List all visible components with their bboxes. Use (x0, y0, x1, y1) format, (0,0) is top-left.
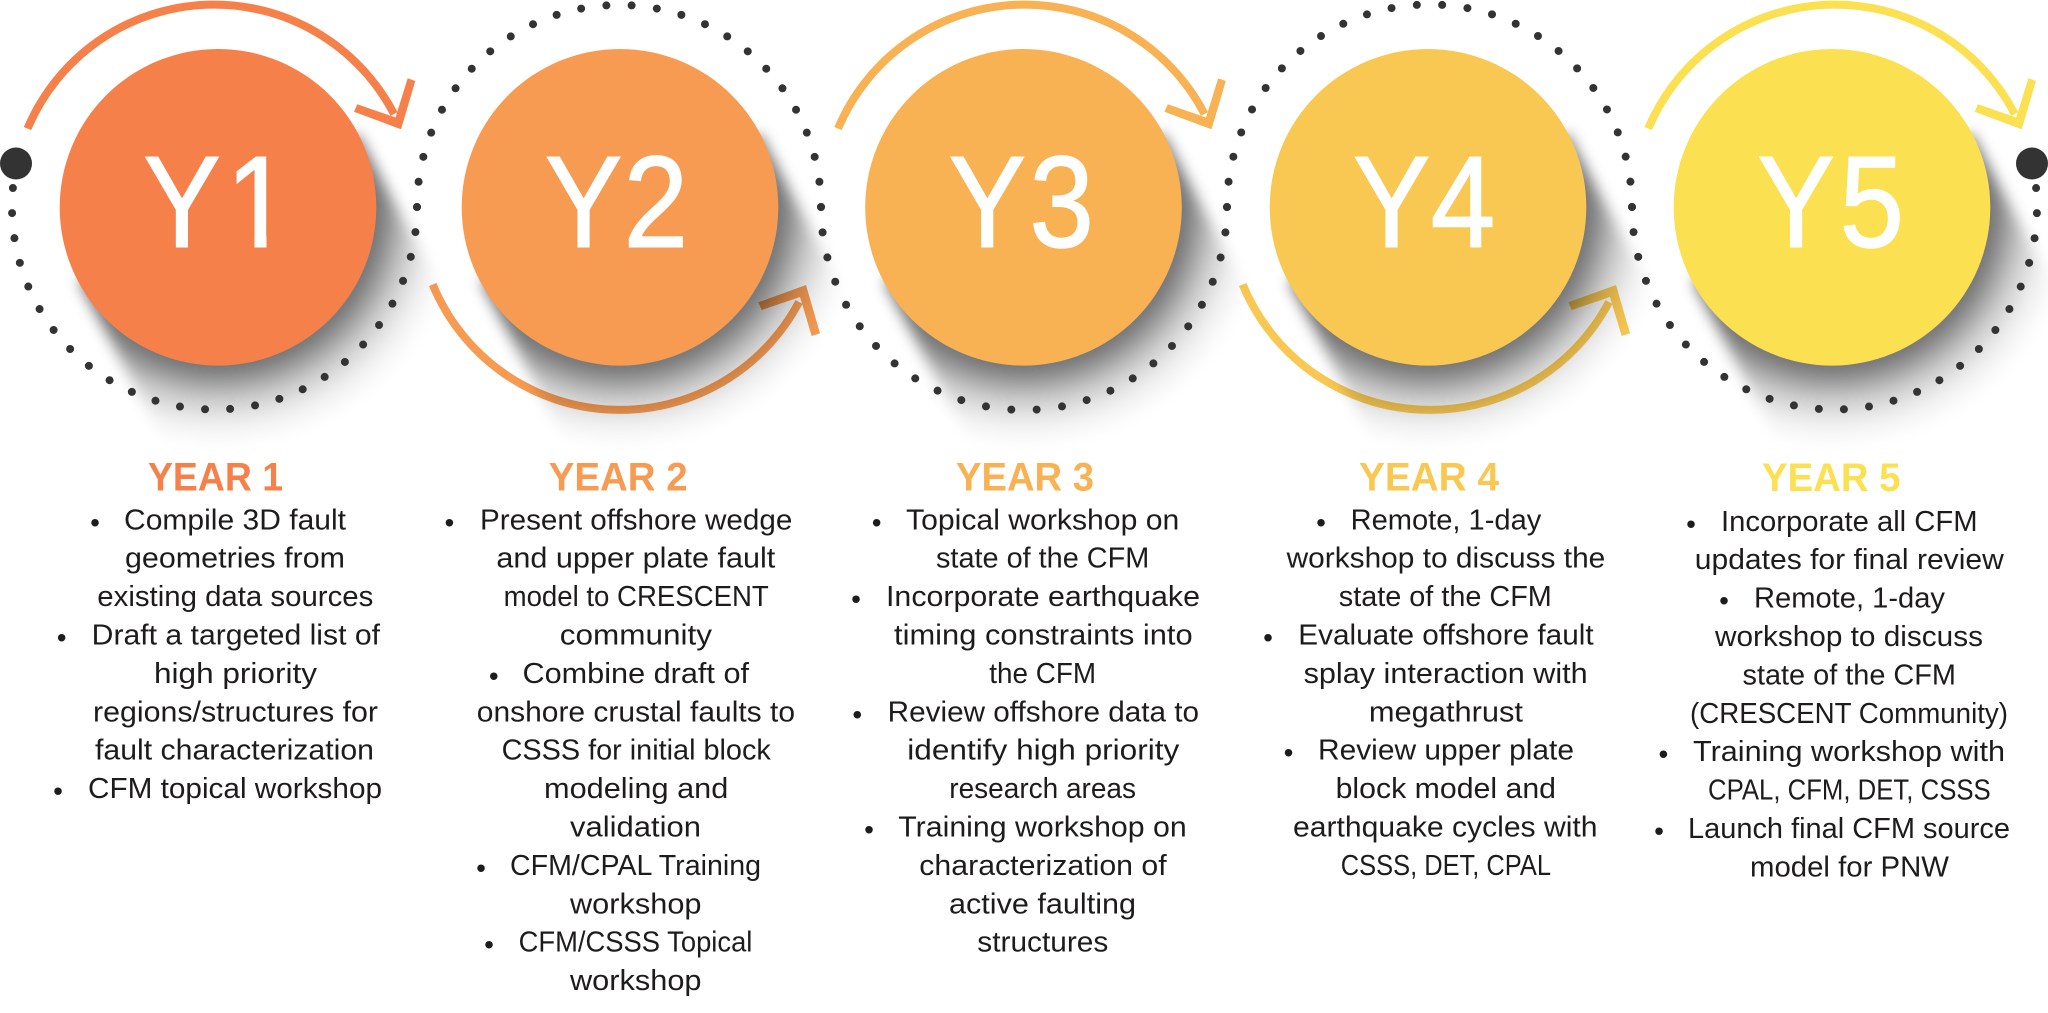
end marker dot (2016, 148, 2048, 180)
text block: year 2 tasks: community (560, 620, 713, 652)
text block: year 4 tasks: Remote, 1-day (1351, 504, 1542, 536)
text block: year 1 tasks: high priority (154, 658, 318, 690)
text block: year 2 tasks: onshore crustal faults to (477, 696, 795, 728)
text block: year 3 tasks: Training workshop on (898, 812, 1187, 844)
text block: year 5 tasks: • (1719, 585, 1729, 616)
text block: year 1 tasks: • (57, 622, 67, 653)
arrow: year 4 bottom arc (1243, 284, 1630, 410)
text block: year 3 tasks: timing constraints into (894, 620, 1193, 652)
text block: year 3 tasks: characterization of (919, 850, 1168, 882)
text block: year 5 tasks: • (1658, 739, 1668, 770)
arrow: year 3 top arc (838, 5, 1226, 129)
start marker dot (0, 148, 32, 180)
text block: year 1 tasks: fault characterization (95, 735, 374, 767)
shadow: year 4 circle (1288, 133, 1685, 501)
heading: year 2: YEAR 2 (549, 456, 688, 500)
text block: year 2 tasks: and upper plate fault (496, 543, 775, 575)
text block: year 2 tasks: • (476, 852, 486, 883)
text block: year 5 tasks: • (1654, 816, 1664, 846)
text block: year 1 tasks: geometries from (125, 543, 345, 575)
text block: year 4 tasks: • (1263, 622, 1273, 653)
text block: year 2 tasks: validation (570, 812, 701, 844)
text block: year 2 tasks: Present offshore wedge (480, 504, 792, 536)
text block: year 1 tasks: regions/structures for (93, 696, 378, 728)
text block: year 1 tasks: existing data sources (97, 581, 373, 613)
text block: year 3 tasks: • (872, 507, 882, 538)
text block: year 5 tasks: Launch final CFM source (1688, 813, 2010, 845)
text block: year 3 tasks: Incorporate earthquake (886, 581, 1200, 613)
text block: year 4 tasks: earthquake cycles with (1293, 812, 1598, 844)
text block: year 5 tasks: model for PNW (1750, 851, 1950, 883)
arrow: year 2 bottom arc (433, 284, 820, 410)
text block: year 2 tasks: workshop (569, 965, 702, 997)
arrow: year 1 top arc (28, 5, 415, 129)
circle: year 3 (865, 49, 1182, 366)
text block: year 3 tasks: • (852, 699, 862, 730)
text block: year 5 tasks: Training workshop with (1693, 736, 2005, 768)
text block: year 3 tasks (851, 504, 1200, 959)
text block: year 5 tasks (1654, 506, 2010, 883)
circle: year 4 (1270, 49, 1586, 366)
shadow: year 1 circle (78, 133, 475, 501)
text block: year 5 tasks: updates for final review (1695, 544, 2005, 576)
text block: year 2 tasks: • (489, 660, 499, 691)
text block: year 1 tasks: Compile 3D fault (124, 504, 346, 536)
circle: year 5 (1674, 49, 1990, 366)
heading: year 5: YEAR 5 (1762, 456, 1900, 500)
shadow: year 5 circle (1692, 133, 2048, 501)
dotted path across all years (12, 5, 2037, 410)
text block: year 3 tasks: Review offshore data to (888, 696, 1199, 728)
text block: year 3 tasks: state of the CFM (936, 543, 1149, 575)
text block: year 5 tasks: Remote, 1-day (1754, 583, 1945, 615)
text block: year 2 tasks: modeling and (544, 773, 728, 805)
text block: year 2 tasks: workshop (569, 888, 702, 920)
text block: year 4 tasks (1263, 504, 1605, 882)
shadow: year 2 circle (480, 133, 877, 501)
text block: year 4 tasks: • (1284, 737, 1293, 768)
text block: year 4 tasks: splay interaction with (1304, 658, 1588, 690)
text block: year 2 tasks: • (444, 507, 454, 538)
text block: year 5 tasks: Incorporate all CFM (1721, 506, 1978, 538)
text block: year 3 tasks: • (864, 814, 874, 845)
text block: year 5 tasks: workshop to discuss (1714, 621, 1983, 653)
text block: year 2 tasks: model to CRESCENT (504, 581, 769, 613)
text block: year 4 tasks: • (1316, 507, 1326, 538)
arrow: year 5 top arc (1648, 5, 2036, 129)
circle: year 2 (462, 49, 778, 366)
text block: year 4 tasks: workshop to discuss the (1286, 543, 1605, 575)
circle: year 5: Y (1758, 130, 1835, 275)
text block: year 3 tasks: • (851, 584, 861, 615)
text block: year 3 tasks: the CFM (989, 658, 1096, 690)
circle: year 1 (60, 49, 376, 366)
text block: year 5 tasks: • (1686, 508, 1696, 539)
shadow: year 3 circle (884, 133, 1280, 501)
circle: year 2: 2 (624, 130, 688, 275)
heading: year 4: YEAR 4 (1359, 456, 1500, 500)
text block: year 1 tasks: CFM topical workshop (88, 773, 382, 805)
text block: year 2 tasks: • (484, 929, 494, 960)
text block: year 4 tasks: Review upper plate (1318, 735, 1574, 767)
text block: year 1 tasks: • (53, 776, 63, 807)
text block: year 4 tasks: state of the CFM (1339, 581, 1552, 613)
text block: year 2 tasks (444, 504, 795, 997)
text block: year 3 tasks: identify high priority (907, 735, 1180, 767)
text block: year 3 tasks: Topical workshop on (906, 504, 1179, 536)
circle: year 3: Y (949, 130, 1026, 275)
text block: year 4 tasks: megathrust (1369, 696, 1523, 728)
text block: year 1 tasks: Draft a targeted list of (92, 620, 381, 652)
circle: year 3: 3 (1030, 130, 1094, 275)
text block: year 3 tasks: research areas (949, 773, 1136, 805)
text block: year 3 tasks: structures (977, 927, 1108, 959)
text block: year 3 tasks: active faulting (949, 888, 1136, 920)
text block: year 5 tasks: (CRESCENT Community) (1690, 698, 2008, 730)
circle: year 4: 4 (1431, 130, 1495, 275)
circle: year 2: Y (545, 130, 622, 275)
text block: year 4 tasks: CSSS, DET, CPAL (1341, 850, 1551, 882)
text block: year 1 tasks (53, 504, 382, 807)
text block: year 5 tasks: CPAL, CFM, DET, CSSS (1708, 775, 1991, 807)
text block: year 2 tasks: CFM/CSSS Topical (519, 927, 752, 959)
circle: year 1: Y (143, 130, 221, 275)
circle: year 4: Y (1353, 130, 1430, 275)
heading: year 3: YEAR 3 (956, 456, 1094, 500)
text block: year 2 tasks: CFM/CPAL Training (510, 850, 761, 882)
text block: year 5 tasks: state of the CFM (1742, 659, 1956, 691)
heading: year 1: YEAR 1 (148, 456, 283, 500)
text block: year 2 tasks: Combine draft of (522, 658, 750, 690)
text block: year 1 tasks: • (90, 507, 100, 538)
text block: year 2 tasks: CSSS for initial block (502, 735, 771, 767)
text block: year 4 tasks: Evaluate offshore fault (1298, 620, 1594, 652)
circle: year 5: 5 (1840, 130, 1904, 275)
text block: year 4 tasks: block model and (1336, 773, 1556, 805)
circle: year 1: 1 (226, 130, 291, 275)
